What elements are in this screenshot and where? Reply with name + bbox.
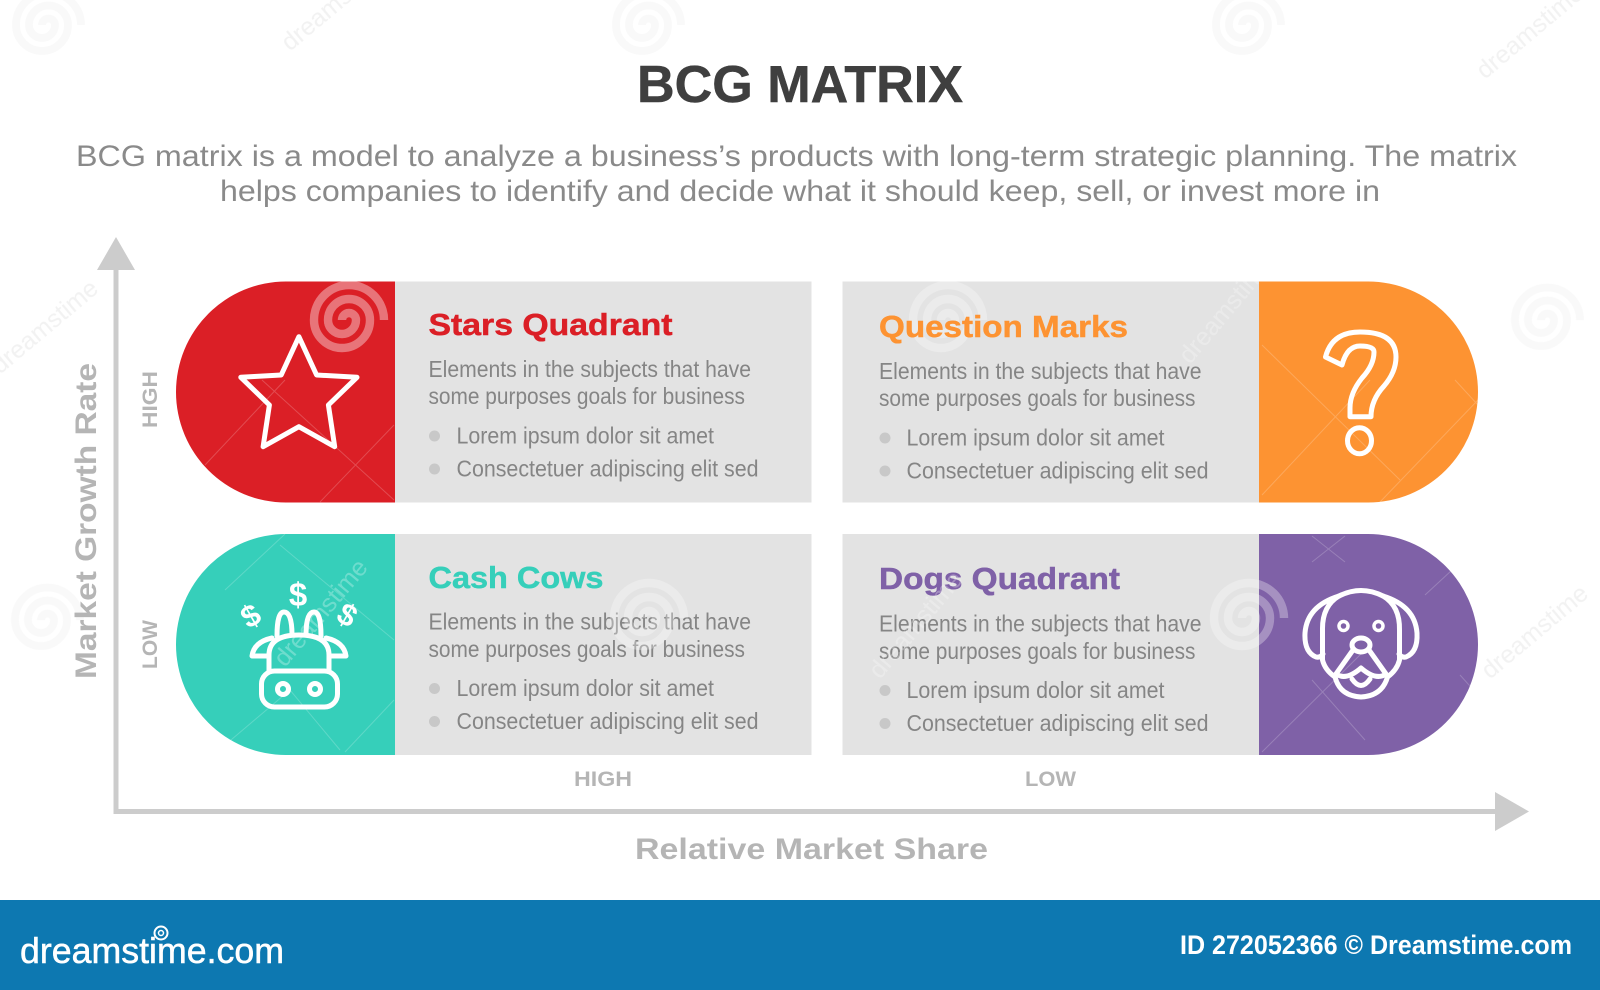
y axis title: Market Growth Rate [70,363,103,679]
icon: star [241,337,357,447]
icon: dog [1305,590,1417,697]
question marks bullets: Lorem ipsum dolor sit amet [906,424,1165,450]
x axis high label: HIGH [574,768,632,791]
cash cows bullets: Lorem ipsum dolor sit amet [456,675,715,701]
stars description: Elements in the subjects that have [428,356,751,382]
y axis arrow [97,237,135,814]
panel: question marks: dreamstime [1173,251,1279,369]
icon: cow with dollars: $ [235,596,267,635]
question marks description: Elements in the subjects that have [879,358,1202,384]
cash cows description: some purposes goals for business [428,636,745,662]
panel: dogs quadrant: dreamstime [863,566,969,684]
dogs description: Elements in the subjects that have [879,610,1202,636]
panel: stars quadrant [176,282,812,502]
panel: question marks [842,251,1478,502]
title: BCG MATRIX [637,56,963,114]
footer banner [0,900,1600,990]
dogs bullets: Consectetuer adipiscing elit sed [906,710,1208,736]
icon: question mark [1326,332,1396,454]
x axis title: Relative Market Share [635,833,988,866]
panel: cash cows [176,534,812,755]
dogs bullets: Lorem ipsum dolor sit amet [906,677,1165,703]
dogs description: some purposes goals for business [879,638,1196,664]
question marks bullets [880,424,1208,484]
stars heading: Stars Quadrant [428,307,672,342]
stars bullets: Lorem ipsum dolor sit amet [456,422,715,448]
subtitle: helps companies to identify and decide what it should keep, sell, or invest more in [220,175,1380,208]
icon: cow with dollars: $ [289,576,307,613]
dogs description [879,610,1202,664]
stars description [428,356,751,409]
stars bullets: Consectetuer adipiscing elit sed [456,456,758,482]
cash cows description: Elements in the subjects that have [428,608,751,634]
y axis low label: LOW [139,620,162,669]
question marks description [879,358,1202,411]
icon: cow with dollars: $ [331,595,363,634]
question marks heading: Question Marks [879,309,1128,344]
y axis high label: HIGH [139,371,162,428]
cash cows bullets [429,675,758,734]
cash cows heading: Cash Cows [428,560,604,595]
stars bullets [429,422,758,482]
BCG matrix infographic: dreamstime [1476,579,1594,685]
subtitle [76,140,1517,208]
icon: cow with dollars [235,576,363,707]
footer logo: dreamstime.com [20,930,284,971]
footer id text: ID 272052366 © Dreamstime.com [1180,930,1572,960]
stars description: some purposes goals for business [428,383,745,409]
panel: dogs quadrant [842,534,1478,755]
question marks description: some purposes goals for business [879,385,1196,411]
dogs heading: Dogs Quadrant [879,561,1120,596]
x axis arrow [114,792,1529,831]
cash cows description [428,608,751,662]
cash cows bullets: Consectetuer adipiscing elit sed [456,708,758,734]
x axis low label: LOW [1025,768,1076,791]
subtitle: BCG matrix is a model to analyze a business’s products with long-term strategic planning. The matrix [76,140,1517,173]
panel: cash cows: dreamstime [268,554,374,672]
question marks bullets: Consectetuer adipiscing elit sed [906,458,1208,484]
dogs bullets [880,677,1208,736]
